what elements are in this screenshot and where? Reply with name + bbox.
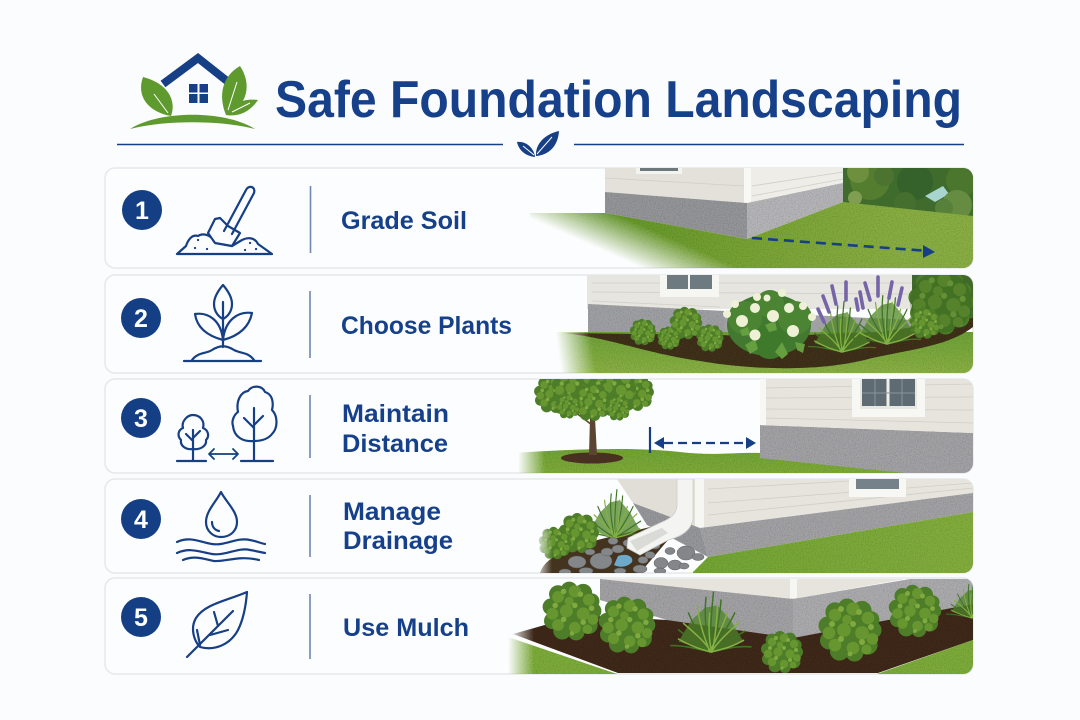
number badge 3: 3 xyxy=(134,405,148,433)
panel: step 5 use mulch xyxy=(105,578,998,674)
number badge 2: 2 xyxy=(134,305,148,333)
label: manage drainage: Manage xyxy=(343,498,441,526)
label: use mulch: Use Mulch xyxy=(343,614,469,642)
number badge 5 xyxy=(121,597,161,637)
label: maintain distance: Distance xyxy=(342,430,448,458)
downspout xyxy=(627,479,693,555)
illustration: graded soil sloping from foundation xyxy=(530,160,978,268)
number badge 2 xyxy=(121,298,161,338)
label: grade soil: Grade Soil xyxy=(341,207,467,235)
number badge 1 xyxy=(122,190,162,230)
illustration: mulched bed around foundation xyxy=(505,579,998,674)
number badge 5: 5 xyxy=(134,604,148,632)
label: maintain distance xyxy=(342,400,449,458)
icon: two trees with distance arrow xyxy=(177,387,276,461)
plant: hydrangea xyxy=(723,289,816,359)
illustration: tree set back from foundation xyxy=(519,379,973,473)
number badge 4: 4 xyxy=(134,506,148,534)
illustration: planted foundation bed xyxy=(545,269,974,373)
number badge 1: 1 xyxy=(135,197,149,225)
label: manage drainage xyxy=(343,498,453,555)
panel: step 3 maintain distance xyxy=(104,378,974,474)
panel: step 4 manage drainage xyxy=(105,479,973,575)
label: maintain distance: Maintain xyxy=(342,400,449,428)
panel: step 2 choose plants xyxy=(105,269,974,373)
panel: step 1 grade soil xyxy=(105,160,978,268)
river rocks xyxy=(559,538,704,575)
number badge 4 xyxy=(121,499,161,539)
icon: seedling xyxy=(184,285,261,361)
label: choose plants: Choose Plants xyxy=(341,312,512,340)
label: manage drainage: Drainage xyxy=(343,527,453,555)
tree crown xyxy=(534,379,654,421)
plant: lavender clumps xyxy=(808,277,921,352)
icon: twin leaf divider xyxy=(517,131,559,157)
number badge 3 xyxy=(121,398,161,438)
icon: leaf xyxy=(187,592,247,657)
title: Safe Foundation Landscaping xyxy=(275,71,962,129)
logo: house with leaves xyxy=(130,58,258,129)
icon: water drop and waves xyxy=(177,492,265,561)
illustration: downspout draining onto rocks xyxy=(539,479,973,575)
icon: shovel in soil xyxy=(177,187,272,254)
